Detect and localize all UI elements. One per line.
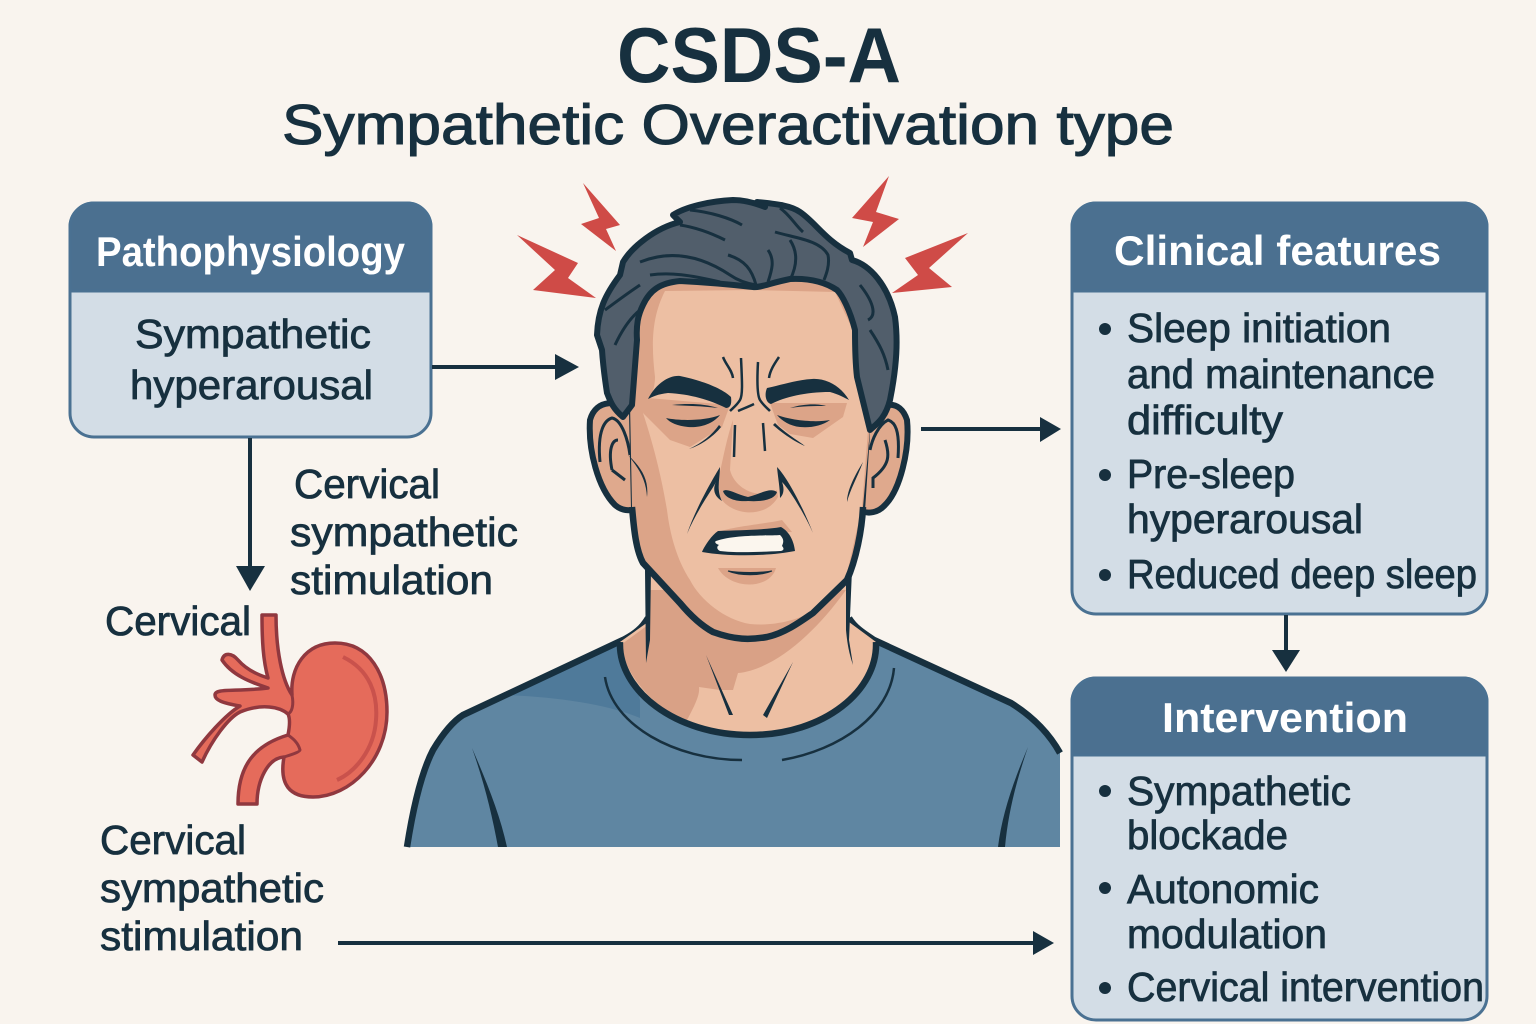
list: intervention: blockade (1127, 812, 1288, 858)
list: clinical features: Sleep initiation (1127, 305, 1391, 351)
face (628, 275, 870, 639)
panel: pathophysiology (70, 203, 431, 437)
label: cervical sympathetic stimulation upper (290, 461, 518, 603)
closed eyes (666, 404, 830, 449)
eye shadows (643, 398, 847, 447)
heading: intervention: Intervention (1162, 694, 1408, 741)
list: intervention: modulation (1127, 911, 1327, 957)
neck (620, 570, 876, 735)
ear right (862, 405, 908, 513)
ear left (590, 403, 634, 510)
label: cervical sympathetic stimulation lower (100, 817, 324, 959)
arrow: pathophysiology to head (432, 354, 579, 380)
heading: clinical features: Clinical features (1114, 227, 1441, 274)
list: clinical features: Reduced deep sleep (1127, 551, 1477, 597)
title (282, 11, 1174, 157)
icon: kidney organ (193, 615, 387, 804)
arrow: head to clinical features (921, 417, 1061, 442)
nasolabial and cheek folds (628, 455, 863, 534)
arrow: clinical features to intervention (1272, 615, 1300, 672)
list: clinical features: difficulty (1127, 397, 1284, 443)
label: cervical sympathetic stimulation lower: stimulation (100, 913, 303, 959)
title: CSDS-A (617, 11, 901, 99)
text: sympathetic hyperarousal: Sympathetic (135, 311, 371, 357)
list: clinical features (1099, 305, 1477, 597)
label: cervical: Cervical (105, 598, 251, 644)
label: cervical sympathetic stimulation upper: sympathetic (290, 509, 518, 555)
shirt (407, 618, 1060, 847)
mouth (702, 527, 795, 575)
list: intervention: Sympathetic (1127, 768, 1351, 814)
label: cervical sympathetic stimulation upper: stimulation (290, 557, 493, 603)
label: cervical sympathetic stimulation lower: sympathetic (100, 865, 324, 911)
arrow: cervical stimulation to intervention (338, 931, 1054, 955)
label: cervical sympathetic stimulation upper: Cervical (294, 461, 440, 507)
panel: intervention (1072, 678, 1487, 1020)
title: Sympathetic Overactivation type (282, 93, 1174, 157)
label: cervical sympathetic stimulation lower: Cervical (100, 817, 246, 863)
panel: clinical features (1072, 203, 1487, 614)
list: intervention: Cervical intervention (1127, 964, 1484, 1010)
nose and lip shading (718, 420, 792, 584)
list: intervention (1099, 768, 1484, 1010)
text: sympathetic hyperarousal (130, 311, 373, 408)
heading: pathophysiology: Pathophysiology (96, 228, 406, 275)
illustration: man with headache (407, 176, 1060, 847)
nose (723, 490, 777, 501)
pain bolts (517, 176, 968, 298)
hair (597, 200, 897, 430)
eyebrows (648, 376, 849, 408)
list: clinical features: and maintenance (1127, 351, 1435, 397)
arrow: pathophysiology down to cervical (236, 438, 265, 591)
list: clinical features: hyperarousal (1127, 496, 1363, 542)
list: clinical features: Pre-sleep (1127, 451, 1295, 497)
text: sympathetic hyperarousal: hyperarousal (130, 362, 373, 408)
list: intervention: Autonomic (1127, 866, 1319, 912)
frown lines (723, 357, 779, 457)
